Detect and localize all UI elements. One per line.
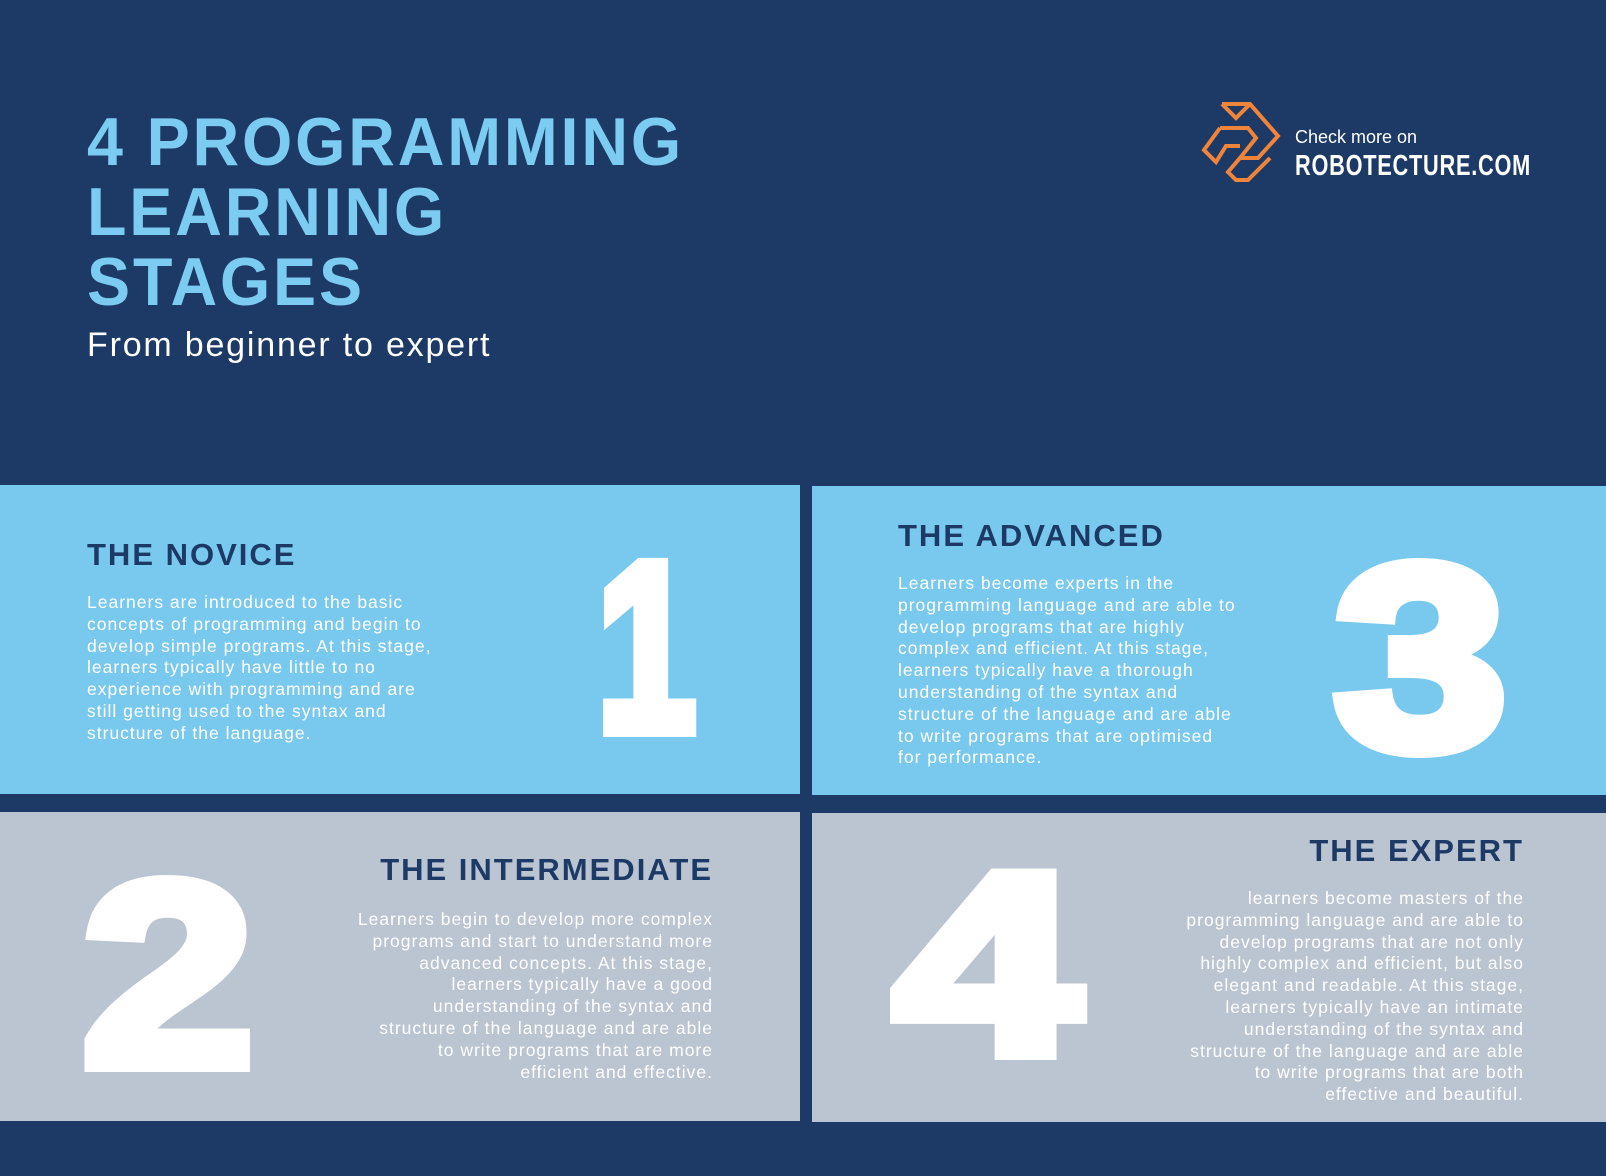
text: novice: concepts of programming and begin to [87, 614, 422, 634]
text: advanced: understanding of the syntax and [898, 682, 1178, 702]
panel: intermediate [0, 812, 800, 1121]
text: expert: effective and beautiful. [1325, 1084, 1524, 1104]
text: expert: learners become masters of the [1248, 888, 1524, 908]
logo [1201, 102, 1531, 182]
title: LEARNING [87, 174, 447, 250]
text: advanced: Learners become experts in the [898, 573, 1174, 593]
text: advanced: structure of the language and are able [898, 704, 1232, 724]
text: intermediate: structure of the language and are able [379, 1018, 713, 1038]
logo: ROBOTECTURE.COM [1295, 150, 1531, 182]
heading: the expert: THE EXPERT [1309, 833, 1524, 868]
text: advanced: learners typically have a thorough [898, 660, 1194, 680]
text: intermediate: understanding of the syntax and [433, 996, 713, 1016]
text: novice: learners typically have little to no [87, 657, 376, 677]
text: expert: highly complex and efficient, but also [1200, 953, 1524, 973]
text: expert: understanding of the syntax and [1244, 1019, 1524, 1039]
text: intermediate: Learners begin to develop more complex [358, 909, 713, 929]
text: novice: Learners are introduced to the basic [87, 592, 403, 612]
subtitle: From beginner to expert [87, 326, 491, 364]
heading: the intermediate: THE INTERMEDIATE [380, 852, 713, 887]
text: expert: programming language and are able to [1186, 910, 1524, 930]
heading: the novice: THE NOVICE [87, 537, 296, 572]
text: intermediate: learners typically have a good [451, 974, 713, 994]
text: advanced [898, 573, 1236, 767]
text: intermediate [358, 909, 713, 1082]
text: expert: learners typically have an intimate [1225, 997, 1524, 1017]
text: intermediate: advanced concepts. At this stage, [419, 953, 713, 973]
text: novice: experience with programming and are [87, 679, 416, 699]
title: 4 PROGRAMMING [87, 104, 684, 180]
text: intermediate: to write programs that are more [438, 1040, 713, 1060]
logo text: Check more on [1295, 127, 1417, 147]
text: advanced: develop programs that are highly [898, 617, 1185, 637]
text: intermediate: programs and start to understand more [372, 931, 713, 951]
panel: advanced [812, 486, 1606, 795]
text: advanced: for performance. [898, 747, 1042, 767]
panel: expert [812, 813, 1606, 1122]
text: intermediate: efficient and effective. [520, 1062, 713, 1082]
text: advanced: programming language and are able to [898, 595, 1236, 615]
text: expert [1186, 888, 1524, 1104]
title: STAGES [87, 244, 365, 320]
text: novice: structure of the language. [87, 723, 311, 743]
text: expert: elegant and readable. At this stage, [1214, 975, 1524, 995]
text: advanced: complex and efficient. At this stage, [898, 638, 1209, 658]
title [87, 104, 684, 320]
text: expert: develop programs that are not only [1220, 932, 1524, 952]
text: novice: still getting used to the syntax and [87, 701, 387, 721]
icon: logo mark [1201, 102, 1281, 182]
text: expert: to write programs that are both [1255, 1062, 1524, 1082]
heading: the advanced: THE ADVANCED [898, 518, 1165, 553]
panel: novice [0, 485, 800, 794]
text: novice [87, 592, 431, 743]
text: expert: structure of the language and are able [1190, 1041, 1524, 1061]
text: novice: develop simple programs. At this stage, [87, 636, 431, 656]
text: advanced: to write programs that are optimised [898, 726, 1213, 746]
